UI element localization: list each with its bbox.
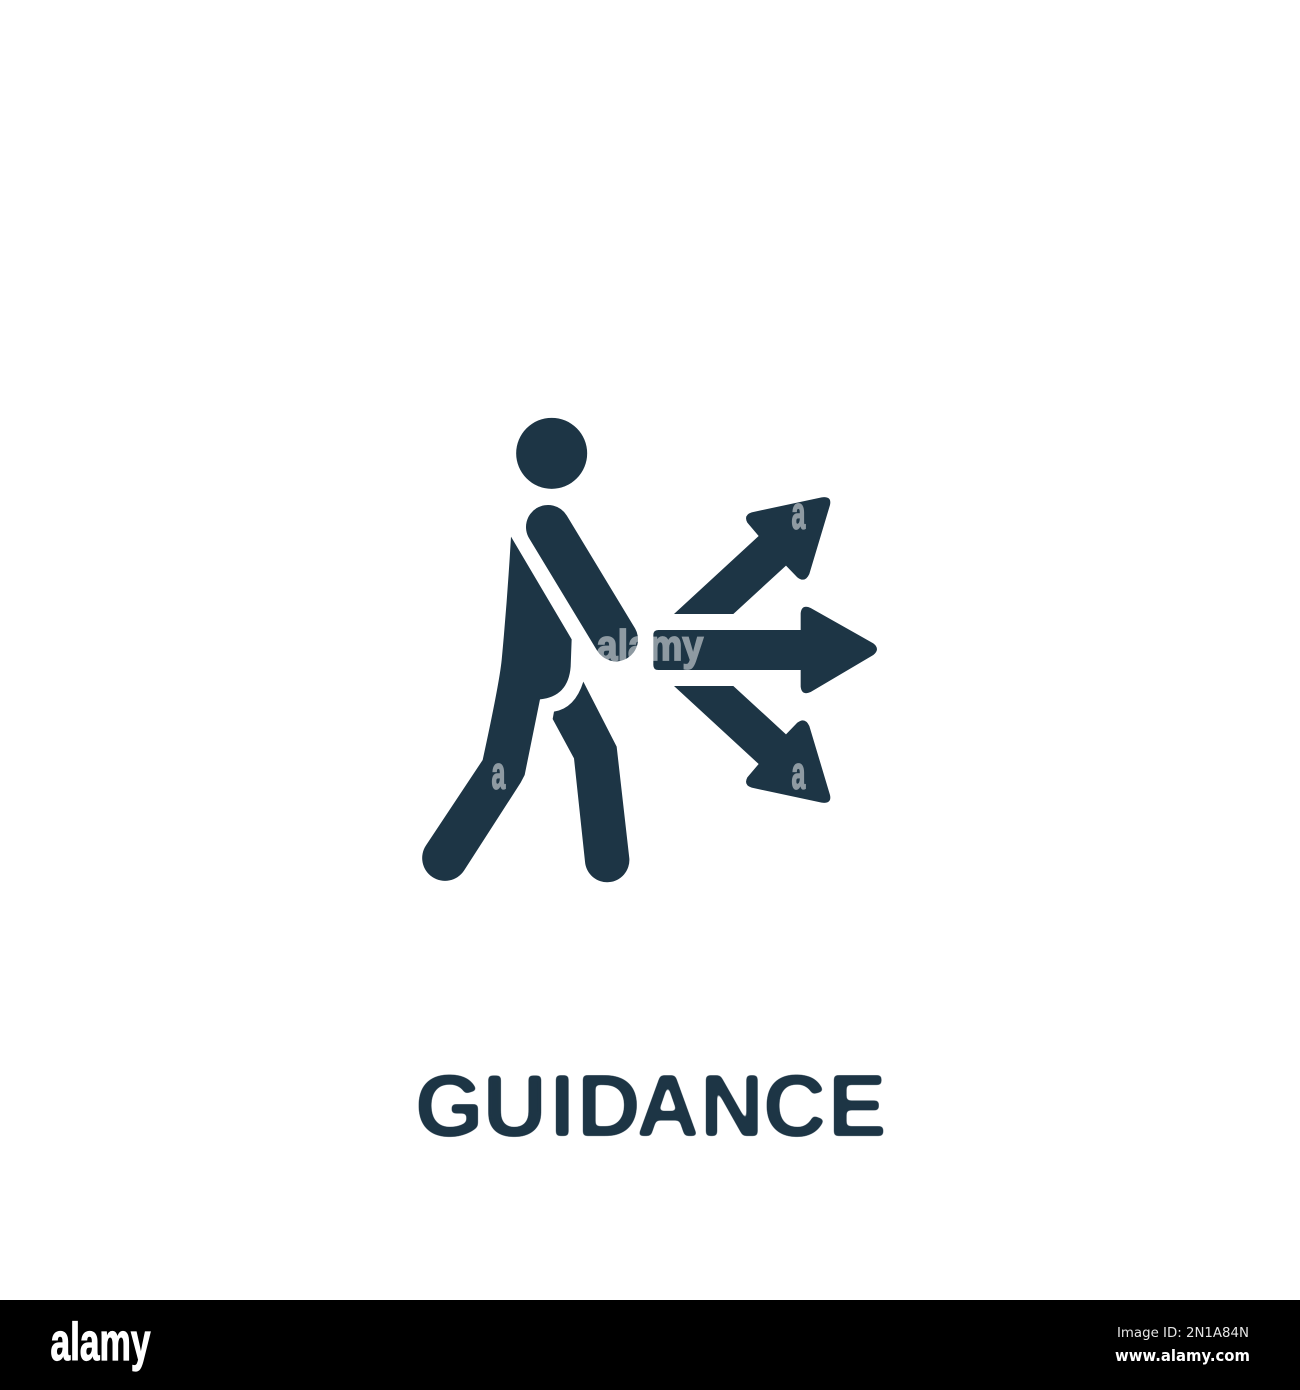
image id: Image ID: 2N1A84N	[1117, 1325, 1249, 1341]
footer bar	[0, 1300, 1300, 1390]
watermark letters: alamy	[597, 622, 704, 670]
watermark letters	[492, 488, 806, 799]
icon: person directing three arrows	[422, 418, 877, 882]
footer logo: alamy	[50, 1313, 151, 1372]
icon: three diverging arrows	[653, 497, 877, 803]
icon: person	[422, 418, 629, 882]
watermark letters: a	[792, 748, 806, 799]
watermark letters: a	[792, 488, 806, 539]
watermark letters: a	[492, 748, 506, 799]
website: www.alamy.com	[1115, 1346, 1250, 1365]
title: GUIDANCE	[415, 1056, 887, 1155]
